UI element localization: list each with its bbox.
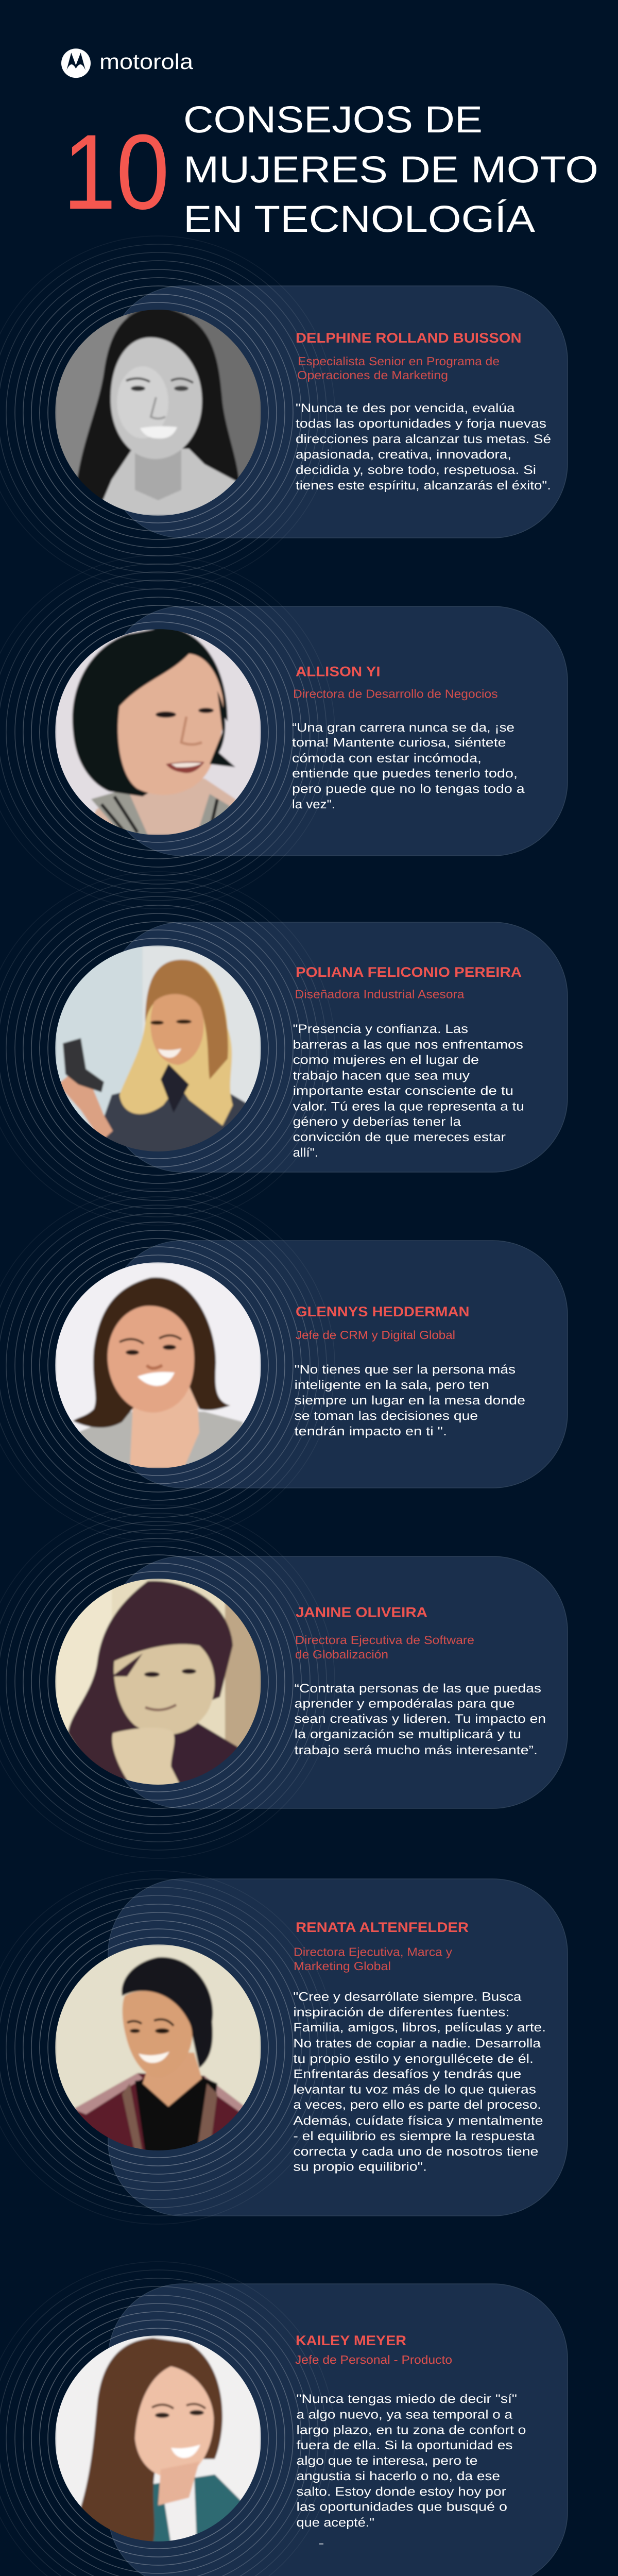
role [295, 1633, 474, 1661]
logo: motorola: motorola [99, 49, 194, 74]
role: Operaciones de Marketing [297, 368, 448, 382]
quote: siempre un lugar en la mesa donde [295, 1394, 525, 1408]
quote: tendrán impacto en ti ". [295, 1425, 447, 1438]
quote: la vez". [292, 798, 335, 811]
quote: sean creativas y lideren. Tu impacto en [295, 1712, 546, 1726]
photo: Kailey [55, 2335, 261, 2544]
card background [108, 1879, 568, 2216]
name: POLIANA FELICONIO PEREIRA [296, 964, 522, 980]
quote: algo que te interesa, pero te [297, 2454, 478, 2468]
name: ALLISON YI [296, 664, 380, 679]
quote: - el equilibrio es siempre la respuesta [293, 2129, 535, 2143]
concentric rings [0, 555, 335, 909]
name: RENATA ALTENFELDER [296, 1920, 469, 1935]
name: DELPHINE ROLLAND BUISSON [296, 330, 521, 346]
quote: “Contrata personas de las que puedas [295, 1682, 541, 1696]
quote: que acepté." [297, 2516, 374, 2530]
panel: Allison Yi [0, 555, 568, 909]
quote [297, 2392, 526, 2544]
quote: Además, cuídate física y mentalmente [293, 2114, 543, 2128]
quote: levantar tu voz más de lo que quieras [293, 2082, 536, 2097]
quote: allí". [293, 1146, 318, 1160]
concentric rings [0, 872, 335, 1225]
quote [295, 1682, 546, 1757]
panel: Renata Altenfelder [0, 1871, 568, 2224]
quote: cómoda con estar incómoda, [292, 751, 482, 766]
quote: como mujeres en el lugar de [293, 1053, 479, 1067]
quote: convicción de que mereces estar [293, 1130, 506, 1144]
panel: Janine Oliveira [0, 1505, 568, 1858]
quote: largo plazo, en tu zona de confort o [297, 2423, 526, 2437]
quote: valor. Tú eres la que representa a tu [293, 1099, 524, 1113]
logo: motorola [61, 48, 194, 78]
panel: Kailey Meyer [0, 2262, 568, 2576]
quote: tienes este espíritu, alcanzarás el éxito". [296, 479, 551, 493]
quote: pero puede que no lo tengas todo a [292, 782, 525, 796]
panel: Glennys Hedderman [0, 1189, 568, 1542]
quote: inteligente en la sala, pero ten [295, 1378, 489, 1392]
role: Marketing Global [294, 1959, 391, 1973]
title [63, 99, 598, 240]
quote [293, 1990, 546, 2174]
quote: la organización se multiplicará y tu [295, 1727, 521, 1741]
quote: apasionada, creativa, innovadora, [296, 448, 511, 462]
quote: Familia, amigos, libros, películas y arte. [293, 2021, 546, 2035]
quote: Enfrentarás desafíos y tendrás que [293, 2067, 521, 2081]
photo: Glennys [55, 1262, 261, 1468]
title: 10 [63, 112, 169, 231]
quote [292, 721, 525, 811]
title: MUJERES DE MOTO [183, 149, 598, 191]
quote: a veces, pero ello es parte del proceso. [293, 2098, 541, 2112]
card background [108, 1556, 568, 1808]
name: JANINE OLIVEIRA [296, 1604, 427, 1620]
quote: angustia si hacerlo o no, da ese [297, 2469, 500, 2483]
card background [108, 1241, 568, 1488]
panel: Poliana Feliconio Pereira [0, 872, 568, 1225]
concentric rings [0, 1871, 335, 2224]
name: KAILEY MEYER [296, 2333, 406, 2348]
role [294, 1945, 453, 1973]
quote: tu propio estilo y enorgullécete de él. [293, 2052, 534, 2066]
quote: decidida y, sobre todo, respetuosa. Si [296, 463, 536, 477]
quote: se toman las decisiones que [295, 1409, 478, 1423]
quote: "Presencia y confianza. Las [293, 1022, 468, 1036]
quote: las oportunidades que busqué o [297, 2500, 507, 2514]
role: Directora de Desarrollo de Negocios [293, 687, 498, 701]
quote: toma! Mantente curiosa, siéntete [292, 736, 506, 750]
quote: entiende que puedes tenerlo todo, [292, 767, 518, 781]
concentric rings [0, 1189, 335, 1542]
concentric rings [0, 2262, 335, 2576]
quote: a algo nuevo, ya sea temporal o a [297, 2408, 513, 2421]
quote: inspiración de diferentes fuentes: [293, 2005, 509, 2019]
quote: correcta y cada uno de nosotros tiene [293, 2145, 538, 2159]
quote: "Nunca tengas miedo de decir "sí" [297, 2392, 517, 2406]
quote: salto. Estoy donde estoy hoy por [297, 2485, 506, 2499]
card background [108, 286, 568, 538]
quote: aprender y empodéralas para que [295, 1697, 515, 1710]
role: Directora Ejecutiva de Software [295, 1633, 474, 1647]
role: de Globalización [295, 1648, 388, 1661]
quote: direcciones para alcanzar tus metas. Sé [296, 432, 551, 446]
quote: importante estar consciente de tu [293, 1084, 513, 1098]
concentric rings [0, 236, 335, 589]
card background [108, 922, 568, 1172]
quote [295, 1363, 525, 1438]
name: GLENNYS HEDDERMAN [296, 1304, 470, 1319]
quote: todas las oportunidades y forja nuevas [296, 417, 546, 431]
photo: Delphine [55, 307, 261, 516]
role: Jefe de Personal - Producto [295, 2353, 452, 2366]
photo: Poliana [55, 945, 261, 1154]
quote: "Nunca te des por vencida, evalúa [296, 401, 515, 415]
quote: trabajo será mucho más interesante”. [295, 1743, 538, 1757]
photo: Allison [55, 626, 261, 835]
quote: su propio equilibrio". [293, 2160, 427, 2174]
panel: Delphine Rolland Buisson [0, 236, 568, 589]
quote [296, 401, 551, 493]
title: EN TECNOLOGÍA [183, 198, 535, 240]
quote: trabajo hacen que sea muy [293, 1069, 470, 1083]
role: Diseñadora Industrial Asesora [295, 987, 465, 1001]
role: Directora Ejecutiva, Marca y [294, 1945, 453, 1959]
photo: Janine [55, 1579, 261, 1787]
role [297, 354, 500, 382]
quote: “Una gran carrera nunca se da, ¡se [292, 721, 514, 735]
role: Jefe de CRM y Digital Global [296, 1328, 455, 1342]
quote: fuera de ella. Si la oportunidad es [297, 2438, 513, 2452]
role: Especialista Senior en Programa de [298, 354, 500, 368]
quote: barreras a las que nos enfrentamos [293, 1038, 523, 1052]
quote: "Cree y desarróllate siempre. Busca [293, 1990, 522, 2004]
concentric rings [0, 1505, 335, 1858]
photo: Renata [55, 1944, 261, 2153]
quote: No trates de copiar a nadie. Desarrolla [293, 2037, 541, 2050]
quote: "No tienes que ser la persona más [295, 1363, 516, 1377]
quote: género y deberías tener la [293, 1115, 461, 1129]
title: CONSEJOS DE [183, 99, 483, 141]
quote [293, 1022, 524, 1160]
card background [108, 2284, 568, 2576]
card background [108, 606, 568, 856]
